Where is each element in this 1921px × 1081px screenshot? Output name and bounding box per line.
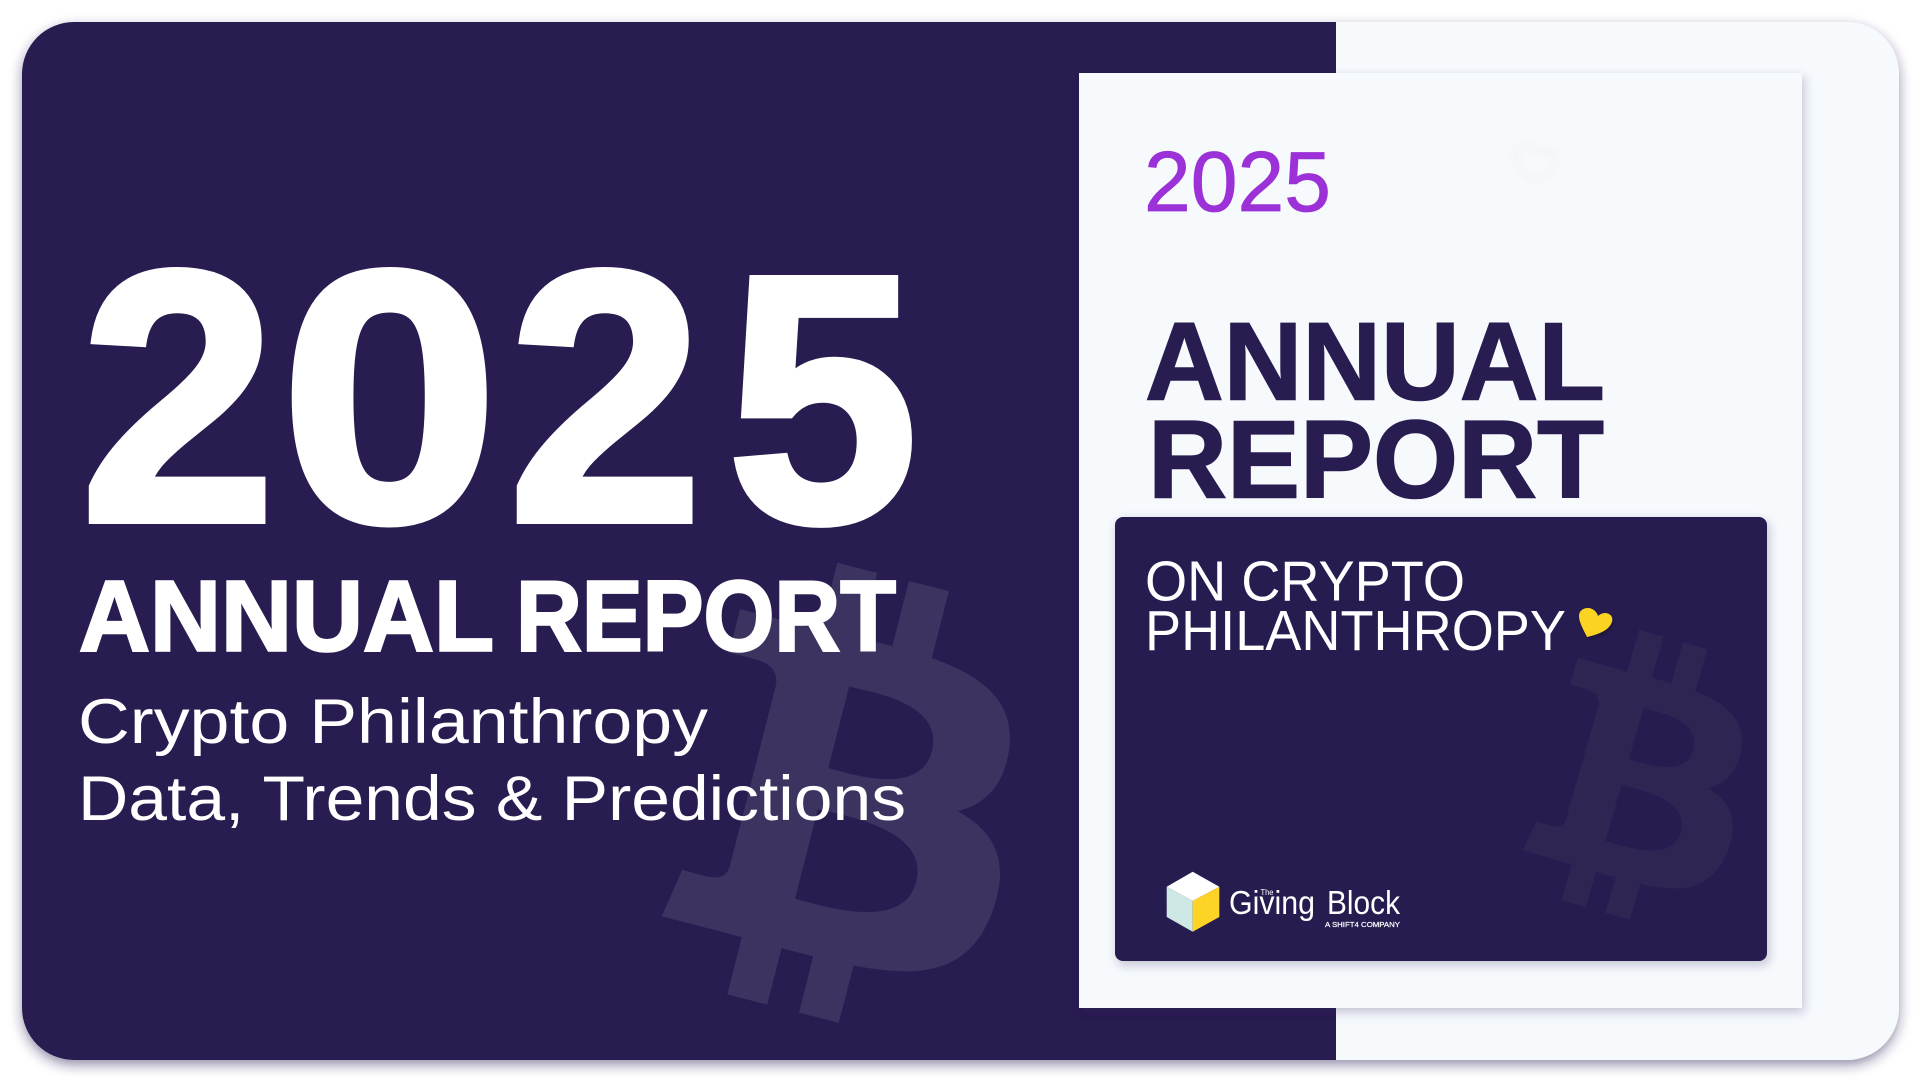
logo wordmark: A SHIFT4 COMPANY	[1325, 922, 1400, 929]
heading: annual report	[79, 560, 896, 672]
cover title: ANNUAL	[1145, 300, 1605, 424]
cover title: REPORT	[1148, 398, 1604, 522]
subtitle text: Crypto Philanthropy	[78, 687, 709, 757]
cover subtitle: PHILANTHROPY	[1145, 599, 1566, 663]
cover inner dark panel	[1115, 517, 1780, 961]
subtitle text: Data, Trends & Predictions	[78, 764, 906, 834]
logo wordmark: Block	[1327, 884, 1400, 921]
dark left panel	[22, 22, 1336, 1060]
icon: yellow heart	[1579, 608, 1612, 637]
heading: annual report: ANNUAL	[79, 560, 494, 672]
faint heart ghost	[1515, 146, 1556, 180]
big year heading: 2	[508, 197, 703, 597]
cover year: 2025	[1144, 135, 1331, 230]
icon: cube	[1167, 872, 1219, 932]
logo wordmark: Giving	[1229, 884, 1315, 921]
logo wordmark: The	[1260, 887, 1274, 897]
icon: bitcoin watermark left	[647, 542, 1067, 1053]
icon: bitcoin watermark cover	[1512, 616, 1780, 941]
logo: The Giving Block	[1167, 872, 1400, 932]
logo wordmark	[1229, 884, 1400, 929]
cover title	[1145, 300, 1605, 522]
cover page	[1079, 73, 1802, 1008]
subtitle text	[78, 687, 906, 834]
panel: report cover	[1079, 73, 1802, 1008]
big year heading: 5	[727, 202, 918, 596]
cover subtitle	[1145, 550, 1566, 663]
big year heading: 0	[280, 196, 499, 597]
big year heading	[80, 196, 918, 597]
heading: annual report: REPORT	[516, 560, 896, 672]
big year heading: 2	[80, 197, 276, 597]
cover subtitle: ON CRYPTO	[1145, 550, 1465, 614]
